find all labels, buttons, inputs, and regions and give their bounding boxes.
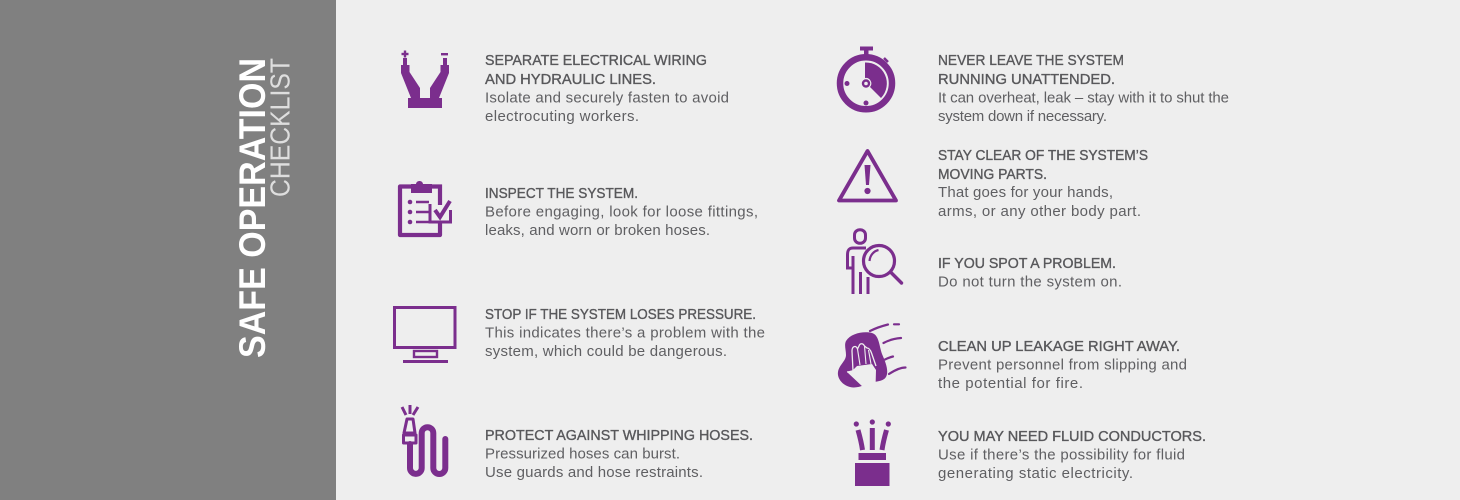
text: spot a problem	[938, 256, 1122, 290]
text: fluid conductors: Use if there’s the possibility for fluid	[938, 446, 1185, 464]
text: clean up leakage	[938, 339, 1187, 392]
text: spot a problem: IF YOU SPOT A PROBLEM.	[938, 256, 1116, 272]
text: stay clear: STAY CLEAR OF THE SYSTEM’S	[938, 148, 1148, 164]
text: never leave unattended: RUNNING UNATTENDED.	[938, 72, 1115, 88]
text: stay clear: That goes for your hands,	[938, 184, 1113, 201]
text: inspect the system: leaks, and worn or broken hoses.	[485, 222, 710, 239]
text: stay clear: MOVING PARTS.	[938, 167, 1047, 183]
text: whipping hoses	[485, 428, 753, 481]
icon: person with magnifier	[846, 230, 902, 294]
text: clean up leakage: Prevent personnel from slipping and	[938, 356, 1187, 374]
text: inspect the system: Before engaging, look for loose fittings,	[485, 204, 758, 221]
icon: warning triangle	[839, 151, 896, 200]
icon: wiping hand	[838, 324, 906, 388]
text: stop if pressure lost: This indicates there’s a problem with the	[485, 325, 765, 342]
text: inspect the system: INSPECT THE SYSTEM.	[485, 186, 638, 202]
text: stay clear: arms, or any other body part.	[938, 203, 1141, 220]
text: stop if pressure lost: STOP IF THE SYSTEM LOSES PRESSURE.	[485, 307, 756, 323]
icon: monitor	[394, 308, 455, 363]
text: separate wiring: Isolate and securely fasten to avoid	[485, 90, 729, 107]
text: clean up leakage: CLEAN UP LEAKAGE RIGHT AWAY.	[938, 339, 1180, 355]
text: clean up leakage: the potential for fire.	[938, 375, 1083, 392]
subtitle: checklist: CHECKLIST	[264, 58, 296, 197]
text: separate wiring: SEPARATE ELECTRICAL WIRING	[485, 53, 707, 69]
text: separate wiring: electrocuting workers.	[485, 108, 639, 125]
text: stop if pressure lost	[485, 307, 765, 360]
text: whipping hoses: PROTECT AGAINST WHIPPING HOSES.	[485, 428, 753, 444]
text: fluid conductors: YOU MAY NEED FLUID CONDUCTORS.	[938, 429, 1206, 445]
icon: fluid conductors	[854, 419, 891, 486]
text: inspect the system	[485, 186, 758, 239]
icon: electrical plug	[401, 50, 449, 108]
panel: title sidebar	[0, 0, 336, 500]
text: never leave unattended	[938, 53, 1229, 125]
text: never leave unattended: It can overheat, leak – stay with it to shut the	[938, 90, 1229, 107]
text: separate wiring: AND HYDRAULIC LINES.	[485, 72, 656, 88]
text: whipping hoses: Pressurized hoses can burst.	[485, 446, 680, 462]
text: separate wiring	[485, 53, 729, 125]
title: safe operation: SAFE OPERATION	[232, 58, 273, 358]
icon: stopwatch	[840, 46, 892, 109]
text: stay clear	[938, 148, 1148, 220]
text: whipping hoses: Use guards and hose restraints.	[485, 464, 703, 481]
icon: clipboard checklist	[400, 181, 450, 235]
text: never leave unattended: system down if necessary.	[938, 108, 1107, 125]
text: spot a problem: Do not turn the system on.	[938, 274, 1122, 290]
text: fluid conductors	[938, 429, 1206, 482]
text: stop if pressure lost: system, which could be dangerous.	[485, 343, 727, 360]
text: fluid conductors: generating static electricity.	[938, 465, 1133, 482]
text: never leave unattended: NEVER LEAVE THE SYSTEM	[938, 53, 1124, 69]
icon: whipping hose	[402, 405, 445, 474]
